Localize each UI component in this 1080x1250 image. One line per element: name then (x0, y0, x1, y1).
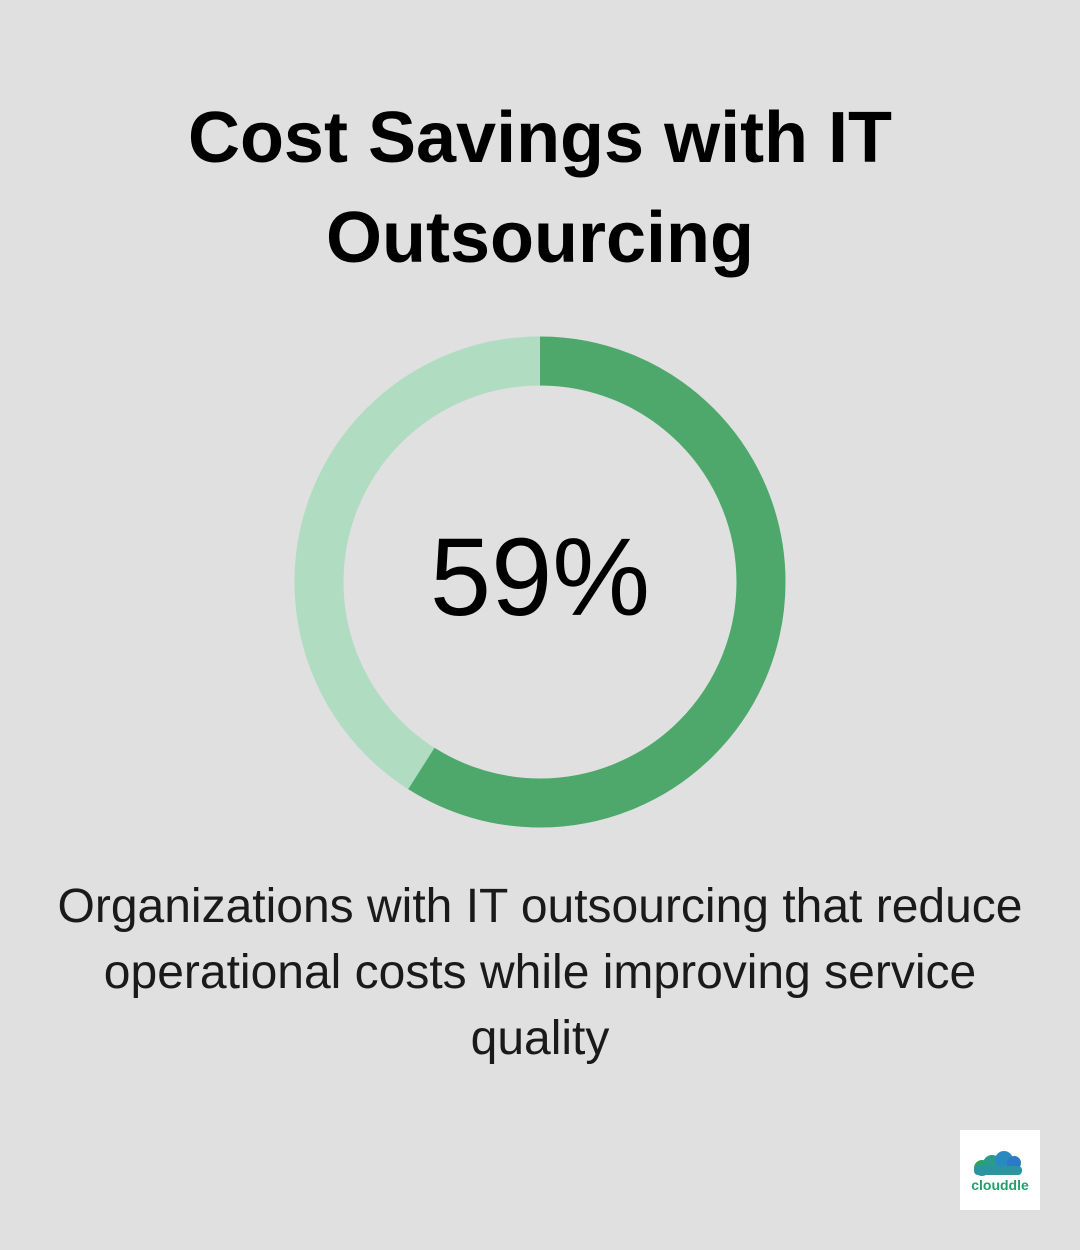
percentage: 59% (430, 516, 650, 639)
logo (960, 1130, 1040, 1210)
title: Cost Savings with IT (188, 98, 892, 178)
description: quality (471, 1012, 609, 1065)
logo: clouddle (971, 1177, 1029, 1193)
title: Outsourcing (326, 198, 754, 278)
description: Organizations with IT outsourcing that reduce (58, 880, 1022, 933)
title (188, 98, 892, 278)
description (58, 880, 1022, 1065)
description: operational costs while improving service (104, 946, 976, 999)
